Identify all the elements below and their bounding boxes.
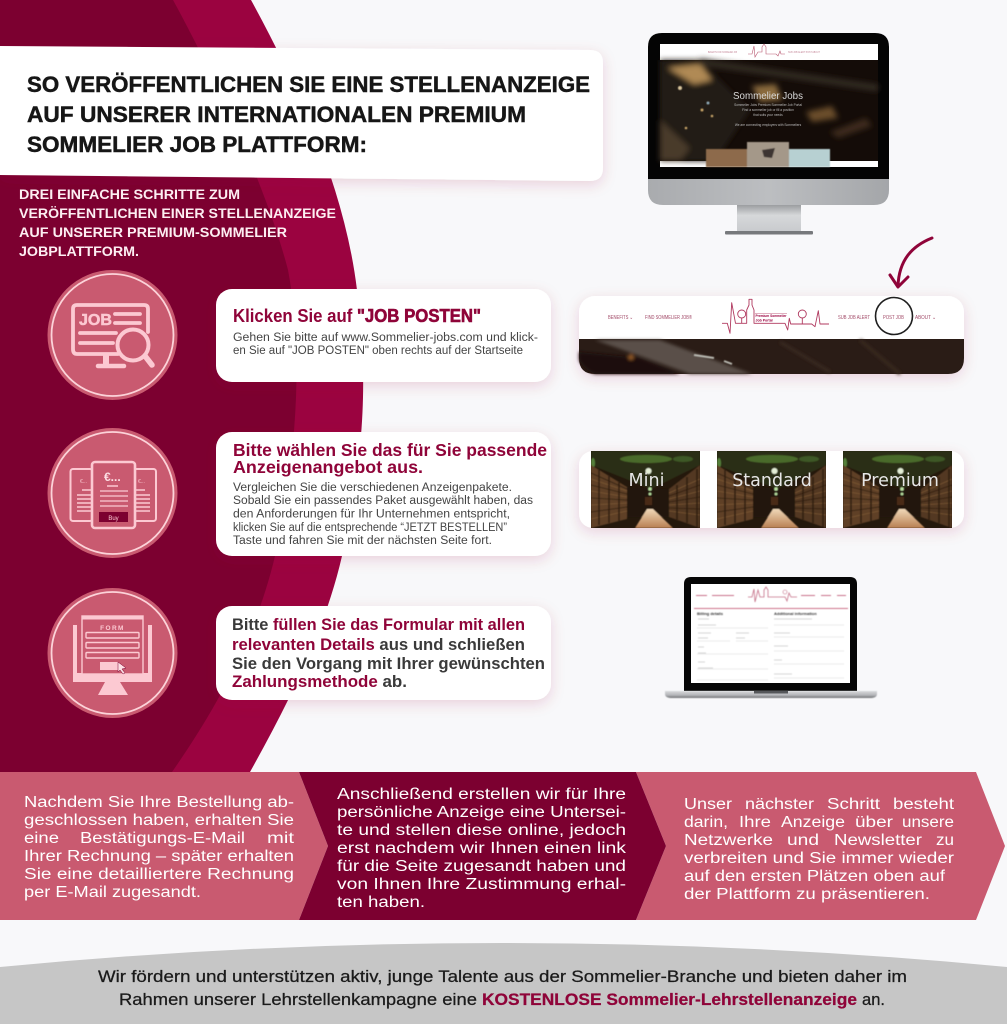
banner navigation labels (608, 314, 936, 321)
package: Premium: Premium (861, 471, 939, 491)
step 3 text: Sie den Vorgang mit Ihrer gewünschten (232, 655, 545, 673)
arrow 1 text: Bestätigungs-E-Mail (80, 830, 245, 847)
step 2 heading: Anzeigenangebot aus. (233, 457, 423, 477)
arrow 3 text: über (855, 814, 893, 831)
step 2 heading: Bitte wählen Sie das für Sie passende (233, 440, 547, 460)
desktop monitor mockup: Find a sommelier job or fill a position (742, 108, 794, 112)
banner photo (579, 339, 964, 374)
icon: form monitor (48, 588, 178, 718)
process arrow 2 (299, 772, 666, 920)
step 2 heading (233, 440, 547, 477)
package: Standard (717, 451, 826, 528)
arrow 1 text (24, 794, 295, 901)
monitor logo (748, 44, 785, 57)
step 2 body: Sobald Sie ein passendes Paket ausgewählt haben, das (233, 495, 533, 507)
desktop monitor mockup: We are connecting employers with Sommeliers (735, 123, 802, 127)
step card 3 (216, 606, 551, 700)
arrow 2 text: von Ihnen Ihre Zustimmung erhal- (337, 876, 626, 893)
footer text: an. (862, 991, 885, 1009)
website navigation banner: Premium Sommelier (756, 314, 787, 318)
arrow 1 text: Nachdem Sie Ihre Bestellung ab- (24, 794, 294, 811)
background shape: dark wine curve (0, 0, 297, 772)
footer text (98, 968, 907, 1009)
arrow 2 text: für die Seite zugesandt haben und (337, 858, 626, 875)
arrow 3 text: und (787, 832, 819, 849)
monitor photo (660, 60, 878, 161)
step 2 body: den Anforderungen für Ihr Unternehmen entspricht, (233, 508, 510, 520)
step 2 body: Taste und fahren Sie mit der nächsten Seite fort. (233, 535, 492, 547)
footer banner (0, 943, 1007, 1024)
package: Premium (843, 451, 952, 528)
arrow 3 text: Anzeige (781, 814, 845, 831)
footer text: KOSTENLOSE Sommelier-Lehrstellenanzeige (482, 991, 857, 1009)
process arrow 3 (636, 772, 1005, 920)
banner navigation labels: POST JOB (883, 315, 904, 321)
arrow 3 text: besteht (893, 796, 955, 813)
step 1 body: Gehen Sie bitte auf www.Sommelier-jobs.com und klick- (233, 332, 538, 344)
icon: pricing cards (48, 428, 178, 558)
post job highlight circle (876, 298, 912, 334)
arrow 1 text: per E-Mail zugesandt. (24, 884, 201, 901)
arrow 1 text: eine (24, 830, 59, 847)
website navigation banner: Job Portal (756, 318, 773, 322)
desktop monitor mockup: that suits your needs (753, 113, 783, 117)
arrow 1 text: Sie eine detailliertere Rechnung (24, 866, 294, 883)
banner logo (722, 299, 829, 333)
step card 1 (216, 289, 551, 382)
banner navigation labels: FIND SOMMELIER JOB® (645, 314, 692, 321)
step 3 text: relevanten Details aus und schließen (232, 636, 525, 654)
arrow 3 text: Ihre (739, 814, 771, 831)
arrow 3 text: nächster (745, 796, 814, 813)
arrow 3 text (684, 796, 955, 903)
step 2 body (233, 482, 533, 547)
arrow 3 text: zu (936, 832, 954, 849)
package: Mini: Mini (629, 471, 664, 491)
arrow 2 text (337, 786, 626, 911)
arrow 3 text: Schritt (827, 796, 881, 813)
laptop form: Billing details (697, 611, 724, 616)
title text: AUF UNSERER INTERNATIONALEN PREMIUM (27, 102, 526, 127)
arrow 1 text: mit (267, 830, 295, 847)
arrow 3 text: darin, (684, 814, 728, 831)
icon: pricing cards: €... (80, 479, 87, 485)
desktop monitor mockup: Sommelier Jobs Premium Sommelier Job Portal (734, 103, 802, 107)
package: Standard: Standard (732, 471, 812, 491)
arrow 2 text: persönliche Anzeige eine Untersei- (337, 804, 626, 821)
laptop site header (694, 587, 848, 609)
subtitle (19, 187, 336, 259)
arrow 2 text: erst nachdem wir Ihnen einen link (337, 840, 626, 857)
title text: SO VERÖFFENTLICHEN SIE EINE STELLENANZEIGE (27, 72, 590, 97)
arrow 3 text: Netzwerke (684, 832, 773, 849)
arrow 1 text: geschlossen haben, erhalten Sie (24, 812, 294, 829)
title text: SOMMELIER JOB PLATTFORM: (27, 132, 367, 157)
arrow 3 text: Newsletter (834, 832, 922, 849)
arrow 3 text: auf den ersten Plätzen oben auf (684, 868, 946, 885)
title text (27, 72, 590, 157)
desktop monitor mockup: BENEFITS FIND SOMMELIER JOB (708, 50, 737, 54)
arrow 2 text: ten haben. (337, 894, 425, 911)
monitor headline: Sommelier Jobs (733, 90, 803, 102)
laptop mockup (665, 577, 877, 698)
icon: pricing cards: Buy (108, 516, 119, 522)
website navigation banner (579, 296, 964, 374)
subtitle: JOBPLATTFORM. (19, 244, 139, 259)
step card 2 (216, 432, 551, 556)
banner navigation labels: SUB JOB ALERT (838, 315, 871, 321)
laptop form (697, 611, 844, 680)
icon: pricing cards: €... (138, 479, 145, 485)
step 3 text (232, 616, 545, 691)
laptop form: Additional information (774, 611, 817, 616)
arrow 3 text: verbreiten und Sie immer wieder (684, 850, 954, 867)
step 1 body: en Sie auf "JOB POSTEN" oben rechts auf der Startseite (233, 345, 523, 357)
icon: form monitor: FORM (100, 625, 125, 632)
arrow 3 text: Unser (684, 796, 732, 813)
subtitle: DREI EINFACHE SCHRITTE ZUM (19, 187, 240, 202)
ad packages card (579, 451, 964, 528)
step 3 text: Bitte füllen Sie das Formular mit allen (232, 616, 525, 634)
arrow 1 text: Ihrer Rechnung – später erhalten (24, 848, 294, 865)
subtitle: VERÖFFENTLICHEN EINER STELLENANZEIGE (19, 206, 336, 221)
arrow 3 text: der Plattform zu präsentieren. (684, 886, 930, 903)
banner navigation labels: ABOUT ⌄ (915, 315, 936, 321)
arrow 2 text: Anschließend erstellen wir für Ihre (337, 786, 626, 803)
footer text: Rahmen unserer Lehrstellenkampagne eine (119, 991, 477, 1009)
package: Mini (591, 451, 700, 528)
arrow (890, 238, 932, 287)
arrow 2 text: te und stellen diese online, jedoch (337, 822, 626, 839)
desktop monitor mockup: SUB JOB ALERT POST ABOUT (788, 50, 820, 54)
step 2 body: Vergleichen Sie die verschiedenen Anzeigenpakete. (233, 482, 512, 494)
icon: job search monitor (48, 270, 178, 400)
banner navigation labels: BENEFITS ⌄ (608, 315, 633, 321)
process arrow 1 (0, 772, 328, 920)
icon: pricing cards: €... (104, 470, 121, 484)
background shape: crimson curve (0, 0, 363, 772)
desktop monitor mockup (648, 33, 889, 234)
step 1 body (233, 332, 538, 357)
subtitle: AUF UNSERER PREMIUM-SOMMELIER (19, 225, 287, 240)
title card (0, 46, 603, 181)
arrow 3 text: unsere (902, 814, 954, 831)
step 2 body: klicken Sie auf die entsprechende “JETZT BESTELLEN” (233, 522, 507, 534)
icon: job search monitor: JOB (79, 312, 112, 329)
footer text: Wir fördern und unterstützen aktiv, junge Talente aus der Sommelier-Branche und bieten daher im (98, 968, 907, 986)
step 3 text: Zahlungsmethode ab. (232, 673, 407, 691)
step 1 heading: Klicken Sie auf "JOB POSTEN" (233, 306, 481, 326)
